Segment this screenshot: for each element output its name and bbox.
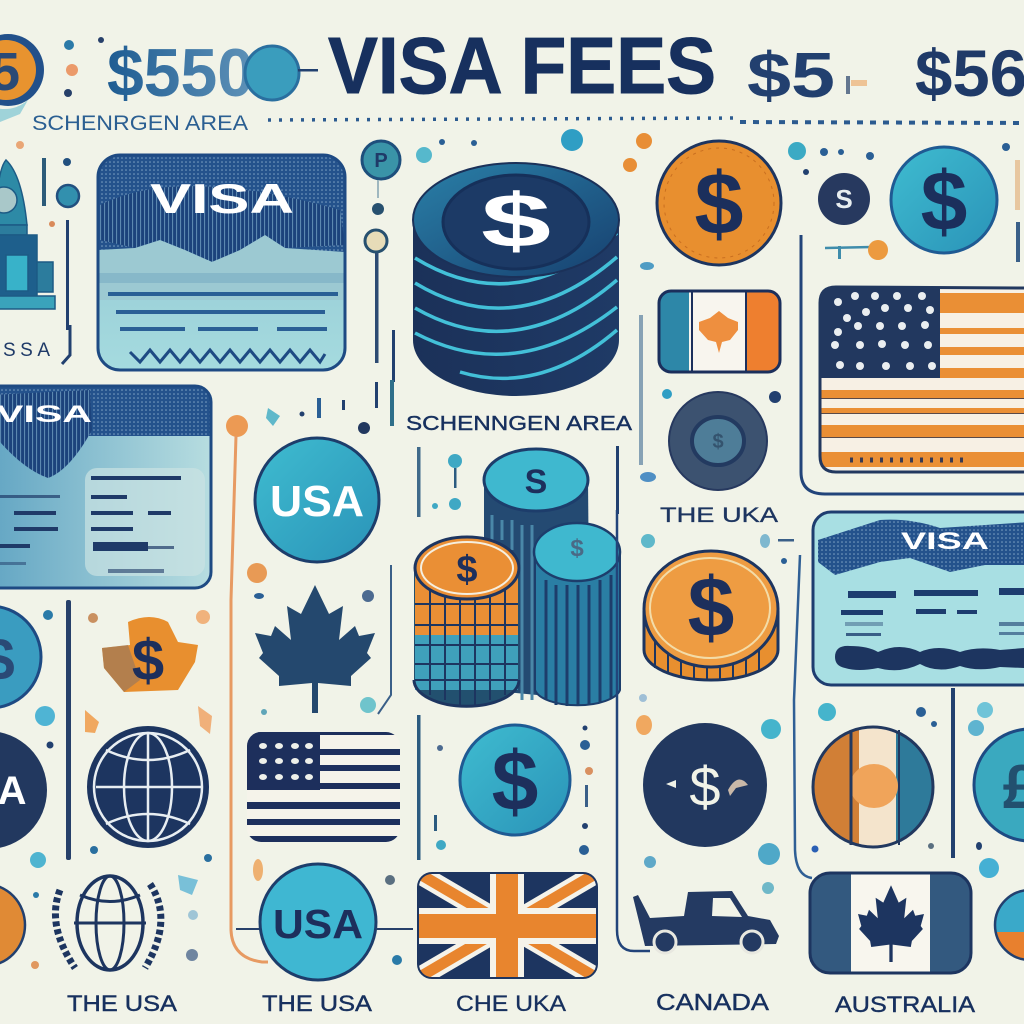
icon: orange coin 3d: $ bbox=[688, 560, 734, 654]
label: the usa 2: THE USA bbox=[262, 991, 372, 1016]
card text lines bbox=[841, 588, 1024, 636]
header: fee amount left: $550 bbox=[107, 35, 254, 111]
panel: visa card top left bbox=[98, 155, 345, 370]
subheading: schengen area: SCHENRGEN AREA bbox=[32, 112, 248, 135]
dots around usa coin bbox=[247, 380, 394, 715]
icon: government building bbox=[0, 160, 55, 309]
card zigzag bbox=[130, 350, 325, 362]
label: canada: CANADA bbox=[656, 989, 770, 1015]
card title: VISA bbox=[150, 175, 294, 222]
icon: coin stack center back: S bbox=[525, 463, 547, 501]
icon: orange dollar map: $ bbox=[132, 628, 164, 693]
icon: small dark dollar coin bbox=[818, 173, 870, 225]
icon: dark dollar circle bbox=[643, 723, 767, 847]
icon: small dark dollar coin: S bbox=[835, 184, 853, 214]
connector: pin line bbox=[825, 240, 888, 260]
icon: teal dollar coin center: $ bbox=[492, 734, 538, 828]
dots left column bbox=[30, 600, 212, 898]
label: australia: AUSTRALIA bbox=[835, 992, 975, 1017]
icon: wreath globe bbox=[55, 876, 161, 970]
icon: usa teal coin bottom: USA bbox=[273, 901, 363, 947]
icon: large coin stack: $ bbox=[481, 179, 551, 264]
card wave band bbox=[835, 646, 1024, 670]
card text lines bbox=[108, 292, 338, 331]
label: schengen area: SCHENNGEN AREA bbox=[406, 412, 632, 435]
icon: uk flag bbox=[418, 873, 597, 978]
icon: dark usa circle left edge bbox=[0, 731, 47, 849]
icon: coin stack center front: $ bbox=[570, 535, 584, 562]
connector: small left marks bbox=[16, 37, 104, 364]
icon: maple leaf bbox=[255, 585, 375, 713]
icon: usa teal coin bbox=[255, 438, 379, 562]
card text lines bbox=[0, 476, 181, 573]
icon: orange dollar coin: $ bbox=[695, 154, 743, 253]
connector lines center bbox=[417, 447, 462, 860]
bracket to bottom row bbox=[794, 555, 999, 878]
icon: teal circle right edge bbox=[974, 729, 1024, 841]
icon: dark coin bbox=[662, 389, 781, 490]
scattered dots wreath bbox=[31, 875, 198, 969]
icon: teal dollar coin bbox=[891, 147, 997, 253]
panel: visa card right bbox=[813, 512, 1024, 685]
dots around top coins bbox=[561, 129, 1020, 262]
icon: orange dollar coin bbox=[657, 141, 781, 265]
label: the uka: THE UKA bbox=[660, 504, 778, 527]
panel: visa card middle left bbox=[0, 386, 211, 588]
header: teal circle with connector bbox=[245, 46, 318, 100]
connector: pins between card and stack: P bbox=[374, 150, 388, 172]
icon: globe bbox=[88, 727, 208, 847]
icon: canada flag bottom bbox=[810, 873, 971, 973]
icon: orange coin left edge bbox=[0, 884, 25, 966]
connector: pins between card and stack bbox=[362, 139, 477, 382]
icon: truck bbox=[633, 891, 779, 953]
icon: usa teal coin: USA bbox=[270, 477, 364, 526]
header: fee amount right: $5 bbox=[747, 39, 835, 111]
connector: bracket to truck bbox=[617, 510, 650, 951]
dots right of coin bbox=[636, 534, 794, 894]
dotted divider bbox=[268, 118, 1024, 123]
icon: tricolor circle bbox=[812, 727, 936, 849]
outline: bracket around us flag bbox=[616, 235, 1024, 514]
icon: teal coin left edge bbox=[0, 606, 41, 708]
icon: orange dollar map bbox=[102, 617, 198, 693]
header: orange connector mark bbox=[846, 76, 867, 94]
icon: orange coin 3d bbox=[644, 551, 778, 681]
label: the usa 1: THE USA bbox=[67, 991, 177, 1016]
icon: bottom right circle bbox=[994, 889, 1024, 961]
card title: VISA bbox=[901, 528, 989, 555]
connector: orange vertical line bbox=[226, 415, 268, 962]
icon: coin stack center orange: $ bbox=[456, 549, 478, 591]
icon: large coin stack bbox=[413, 163, 619, 396]
icon: teal dollar coin: $ bbox=[921, 154, 967, 248]
header: fee amount far right: $56 bbox=[915, 36, 1024, 110]
header: partial orange coin bbox=[0, 34, 44, 122]
icon: large usa flag bbox=[820, 287, 1024, 473]
icon: coin stack center front bbox=[534, 523, 620, 706]
label: the uka bottom: CHE UKA bbox=[456, 991, 566, 1016]
title: VISA FEES bbox=[328, 21, 716, 110]
icon: dark dollar circle: $ bbox=[689, 755, 721, 818]
icon: coin stack center back bbox=[484, 449, 590, 700]
icon: flag of canada top bbox=[658, 290, 781, 373]
icon: dark coin: $ bbox=[712, 431, 724, 453]
icon: usa teal coin bottom bbox=[253, 859, 413, 980]
icon: usa flag small bbox=[247, 732, 400, 842]
icon: teal dollar coin center bbox=[460, 725, 593, 855]
icon: coin stack center orange bbox=[414, 537, 519, 706]
text: ssa: SSA bbox=[3, 340, 50, 361]
